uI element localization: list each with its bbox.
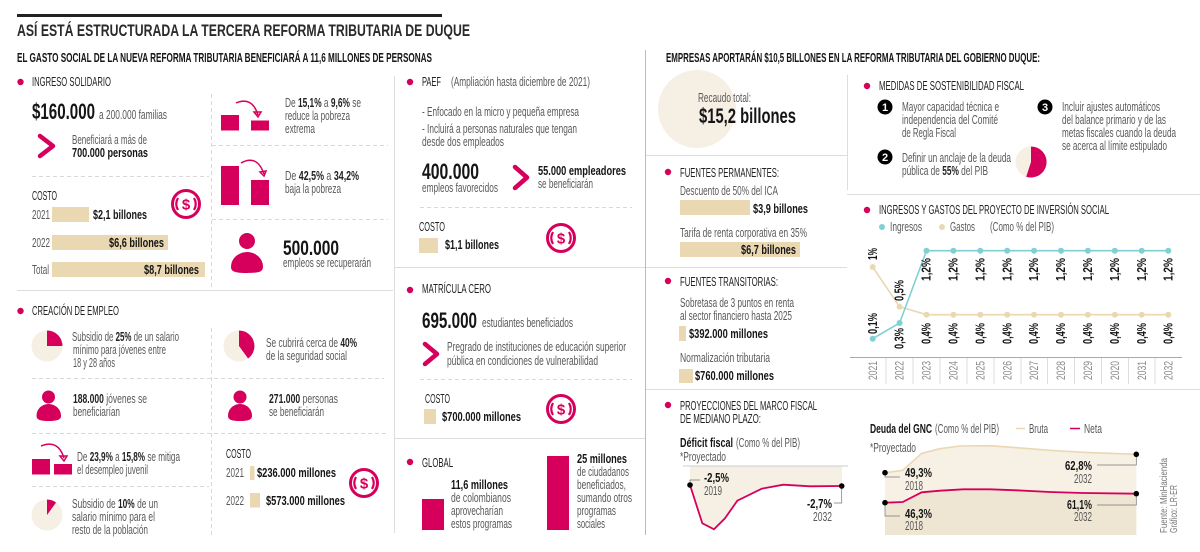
- stat: 695.000: estudiantes beneficiados: [482, 315, 573, 330]
- bullet heading: matrícula cero: MATRÍCULA CERO: [422, 281, 491, 296]
- heading: gasto social: EL GASTO SOCIAL DE LA NUEVA REFORMA TRIBUTARIA BENEFICIARÁ A 11,6 MILLONES DE PERSONAS: [17, 50, 432, 65]
- stat: 500.000 empleos: [283, 237, 371, 270]
- cost bars: creación de empleo: COSTO: [226, 446, 251, 461]
- panel: fuentes permanentes: $6,7 billones: [741, 242, 796, 257]
- x axis years: 2027: [1027, 361, 1041, 380]
- cost bars: ingreso solidario: 2022: [32, 235, 50, 250]
- data labels: 1,2%: [1134, 258, 1149, 281]
- cost bars: ingreso solidario: COSTO: [32, 188, 57, 203]
- panel: global: [407, 451, 632, 531]
- measure 3: 3: [1042, 102, 1048, 114]
- text: subsidio 25: [72, 329, 179, 370]
- icon: coin: $: [360, 476, 369, 492]
- cost bars: creación de empleo: $236.000 millones: [257, 465, 336, 480]
- chart title and legend: Neta: [1084, 421, 1102, 436]
- panel: fuentes transitorias: FUENTES TRANSITORIAS:: [680, 274, 778, 289]
- data labels: 0,4%: [1080, 323, 1095, 344]
- text: subsidio 10: [72, 496, 158, 537]
- legend: (Como % del PIB): [990, 219, 1054, 234]
- bullet heading: global: [407, 455, 453, 470]
- legend: [879, 219, 1054, 234]
- bullet heading: ingreso solidario: [17, 74, 111, 89]
- panel: recaudo total: Recaudo total:: [698, 90, 751, 105]
- icon: coin: $: [182, 196, 191, 214]
- measure 1: 1: [882, 102, 888, 114]
- x axis years: 2025: [974, 361, 988, 380]
- bullet heading: ingreso solidario: INGRESO SOLIDARIO: [32, 74, 111, 89]
- data labels: 1,2%: [1026, 258, 1041, 281]
- text: subsidio 10: Subsidio de 10% de un: [72, 496, 158, 511]
- text: pobreza extrema: reduce la pobreza: [285, 108, 350, 123]
- x axis years: 2021: [866, 361, 880, 380]
- text: 188.000: 188.000 jóvenes se: [73, 391, 147, 406]
- text: seguridad social: [266, 335, 357, 363]
- bullet heading: matrícula cero: [407, 281, 491, 296]
- text: desempleo juvenil: De 23,9% a 15,8% se mitiga: [77, 449, 180, 464]
- pie: 40 percent: [224, 330, 254, 362]
- data labels: 0,4%: [1026, 323, 1041, 344]
- data labels: 0,5%: [892, 280, 906, 301]
- cost bars: ingreso solidario: [32, 188, 205, 277]
- bullet heading: medidas: [864, 78, 1024, 93]
- bar: 25 millones: [547, 456, 569, 530]
- panel: medidas de sostenibilidad fiscal: [864, 78, 1176, 178]
- measure 3: [1038, 99, 1176, 153]
- text: 11,6 millones: [451, 477, 512, 531]
- panel: fuentes permanentes: Descuento de 50% del ICA: [680, 183, 778, 198]
- text: pregrado: pública en condiciones de vulnerabilidad: [447, 353, 598, 368]
- pie: 55 percent: [1016, 146, 1047, 178]
- area chart: deuda: 61,1%: [1067, 497, 1092, 512]
- area chart: deuda: 62,8%: [1065, 458, 1092, 473]
- icon: coin: [548, 396, 574, 422]
- line chart: ingresos y gastos: [850, 202, 1182, 384]
- amount: 160.000: $160.000: [32, 99, 95, 124]
- stat: 400.000: 400.000: [422, 159, 479, 184]
- icon: person: [231, 233, 263, 273]
- icon: pobreza bars: [221, 160, 269, 205]
- data labels: 1,2%: [1160, 258, 1175, 281]
- text: seguridad social: de la seguridad social: [266, 348, 347, 363]
- panel: fuentes transitorias: Normalización tributaria: [680, 350, 770, 365]
- data labels: 1,2%: [918, 258, 934, 281]
- text: pregrado: Pregrado de instituciones de educación superior: [447, 339, 626, 354]
- panel: fuentes permanentes: [665, 165, 808, 257]
- text: desempleo juvenil: [77, 449, 180, 477]
- bullet heading: proyecciones: [665, 398, 817, 426]
- stat: 500.000 empleos: 500.000: [283, 237, 339, 260]
- text: beneficiará: Beneficiará a más de: [72, 132, 147, 147]
- panel: proyecciones déficit fiscal: [665, 398, 848, 529]
- cost bars: ingreso solidario: $2,1 billones: [93, 207, 147, 222]
- title rule and heading: [17, 14, 470, 40]
- cost bars: ingreso solidario: Total: [32, 262, 49, 277]
- source credit: Gráfico: LR-ER: [1168, 485, 1180, 533]
- panel: fuentes transitorias: [665, 274, 794, 383]
- chart title and legend: Bruta: [1029, 421, 1048, 436]
- measure 2: 2: [882, 152, 888, 164]
- cost bar: matrícula: $700.000 millones: [442, 409, 521, 424]
- chart title: déficit: (Como % del PIB): [736, 435, 800, 450]
- text: empleadores: [538, 163, 626, 191]
- title rule and heading: ASÍ ESTÁ ESTRUCTURADA LA TERCERA REFORMA TRIBUTARIA DE DUQUE: [17, 21, 470, 40]
- panel: recaudo total: $15,2 billones: [699, 105, 796, 128]
- data labels: 1,2%: [999, 258, 1014, 281]
- text: subsidio 10: salario mínimo para el: [72, 509, 155, 524]
- icon: coin: [172, 190, 200, 218]
- text: empleadores: se beneficiarán: [538, 176, 593, 191]
- panel: ingreso solidario: [17, 74, 388, 287]
- cost bars: ingreso solidario: 2021: [32, 207, 50, 222]
- text: pregrado: [447, 339, 626, 368]
- data labels: 1%: [865, 248, 880, 260]
- x axis years: 2023: [920, 361, 934, 380]
- data labels: [865, 248, 1175, 349]
- bullet heading: PAEF: PAEF: [422, 74, 441, 89]
- x axis years: 2032: [1161, 361, 1175, 380]
- data labels: 0,3%: [892, 328, 906, 349]
- data labels: 0,4%: [999, 323, 1014, 344]
- data labels: 1,2%: [1053, 258, 1068, 281]
- text: subsidio 25: mínimo para jóvenes entre: [73, 342, 166, 357]
- area chart: déficit fiscal: -2,7%: [807, 496, 832, 511]
- x axis years: 2024: [946, 361, 960, 380]
- amount: 160.000: [32, 99, 167, 124]
- cost bars: ingreso solidario: $6,6 billones: [109, 235, 164, 250]
- measure 1: [878, 99, 999, 140]
- data labels: 0,4%: [1053, 323, 1068, 344]
- pie: 25 percent: [32, 330, 62, 362]
- text: 271.000: se beneficiarán: [269, 404, 324, 419]
- data labels: 0,4%: [1134, 323, 1149, 344]
- measure 2: Definir un anclaje de la deuda: [902, 150, 1011, 165]
- text: desempleo juvenil: el desempleo juvenil: [77, 462, 148, 477]
- text: 188.000: beneficiarían: [73, 404, 120, 419]
- measure 2: [878, 150, 1011, 178]
- panel: fuentes transitorias: Sobretasa de 3 puntos en renta: [680, 295, 794, 310]
- x axis years: [866, 361, 1175, 380]
- data labels: 1,2%: [946, 258, 960, 281]
- chart title: déficit: *Proyectado: [680, 449, 726, 464]
- legend: Ingresos: [890, 219, 922, 234]
- icon: coin: [548, 224, 574, 252]
- series: ingresos: [870, 248, 1171, 342]
- text: pobreza extrema: [285, 95, 361, 136]
- data labels: 1,2%: [1080, 258, 1095, 281]
- data labels: 0,4%: [972, 323, 988, 344]
- panel: fuentes permanentes: $3,9 billones: [753, 201, 808, 216]
- x axis years: 2020: [1108, 361, 1122, 380]
- text: subsidio 10: resto de la población: [72, 522, 148, 537]
- text: 25 millones: 25 millones: [577, 451, 627, 466]
- amount: 160.000: a 200.000 familias: [99, 107, 167, 122]
- text: empleadores: 55.000 empleadores: [538, 163, 626, 178]
- measure 2: pública de 55% del PIB: [902, 163, 988, 178]
- icon: coin: $: [557, 230, 566, 248]
- cost bar: PAEF: [419, 219, 499, 253]
- icon: chevron: [515, 167, 527, 188]
- legend: Gastos: [950, 219, 975, 234]
- text: 11,6 millones: estos programas: [451, 516, 512, 531]
- bullet heading: ingresos y gastos: [864, 202, 1109, 217]
- pie: 10 percent: [32, 500, 62, 530]
- measure 1: Mayor capacidad técnica e: [902, 99, 999, 114]
- x axis years: 2026: [1000, 361, 1014, 380]
- icon: person: [228, 390, 252, 421]
- cost bars: creación de empleo: 2021: [226, 465, 244, 480]
- bullet heading: PAEF: (Ampliación hasta diciembre de 2021): [451, 74, 590, 89]
- bullet heading: creación de empleo: [17, 303, 119, 318]
- cost bar: matrícula: [424, 391, 521, 424]
- panel: fuentes transitorias: $392.000 millones: [689, 326, 768, 341]
- measure 1: independencia del Comité: [902, 112, 998, 127]
- text: 11,6 millones: de colombianos: [451, 490, 511, 505]
- stat: 400.000: empleos favorecidos: [422, 180, 498, 195]
- data labels: 1,2%: [1107, 258, 1122, 281]
- bullet heading: creación de empleo: CREACIÓN DE EMPLEO: [32, 303, 119, 318]
- text: 25 millones: sumando otros: [577, 490, 632, 505]
- chart title and legend: *Proyectado: [870, 440, 916, 455]
- panel: creación de empleo: [17, 303, 387, 537]
- cost bars: creación de empleo: $573.000 millones: [266, 493, 345, 508]
- source credit: Fuente: MinHacienda: [1158, 458, 1170, 533]
- text: 25 millones: sociales: [577, 516, 605, 531]
- area chart: déficit fiscal: 2032: [813, 509, 832, 524]
- area chart: déficit fiscal: -2,5%: [704, 470, 729, 485]
- text: 25 millones: [577, 451, 632, 531]
- chart title and legend: Deuda del GNC: [870, 421, 932, 436]
- chart title: déficit: Déficit fiscal: [680, 435, 733, 450]
- cost bar: matrícula: COSTO: [425, 391, 450, 406]
- source credit: [1158, 458, 1180, 533]
- area chart: deuda: 2032: [1074, 509, 1092, 524]
- icon: coin: $: [557, 402, 566, 418]
- series: gastos: [870, 264, 1171, 318]
- bullet heading: medidas: MEDIDAS DE SOSTENIBILIDAD FISCAL: [879, 78, 1024, 93]
- stat: 400.000: [422, 159, 498, 195]
- text: pobreza extrema: extrema: [285, 121, 315, 136]
- text: 25 millones: beneficiados,: [577, 477, 626, 492]
- text: 271.000: [269, 391, 338, 419]
- area chart: deuda: 2018: [905, 518, 923, 533]
- icon: coin: [350, 470, 378, 496]
- chart title and legend: [870, 421, 1102, 455]
- icon: person: [36, 390, 61, 421]
- data labels: 1,2%: [972, 258, 988, 281]
- text: pobreza: De 42,5% a 34,2%: [285, 168, 359, 183]
- icon: desempleo bars: [32, 444, 72, 474]
- data labels: 0,1%: [865, 313, 880, 334]
- bullet heading: proyecciones: PROYECCIONES DEL MARCO FISCAL: [680, 398, 817, 413]
- bullet heading: global: GLOBAL: [422, 455, 453, 470]
- text: 188.000: [73, 391, 147, 419]
- text: seguridad social: Se cubrirá cerca de 40%: [266, 335, 357, 350]
- stat: 500.000 empleos: empleos se recuperarán: [283, 255, 371, 270]
- bullet heading: PAEF: [407, 74, 590, 89]
- text: PAEF description: - Incluirá a personas naturales que tengan: [422, 121, 577, 136]
- panel: matrícula cero: [407, 281, 632, 424]
- area chart: déficit fiscal: [683, 466, 848, 529]
- text: 25 millones: programas: [577, 503, 616, 518]
- bar: 11,6 millones: [422, 499, 444, 530]
- text: 11,6 millones: 11,6 millones: [451, 477, 508, 492]
- icon: chevron: [425, 344, 437, 364]
- chart title and legend: (Como % del PIB): [935, 421, 999, 436]
- area chart: deuda: 49,3%: [905, 465, 932, 480]
- text: beneficiará: [72, 132, 148, 160]
- stat: 695.000: [422, 308, 573, 333]
- data labels: 0,4%: [1107, 323, 1122, 344]
- panel: PAEF: [407, 74, 632, 253]
- icon: pobreza extrema bars: [221, 101, 269, 130]
- data labels: 0,4%: [946, 323, 960, 344]
- panel: fuentes permanentes: FUENTES PERMANENTES:: [680, 165, 779, 180]
- panel: fuentes transitorias: al sector financiero hasta 2025: [680, 308, 792, 323]
- text: pobreza extrema: De 15,1% a 9,6% se: [285, 95, 361, 110]
- area chart: deuda: 2018: [905, 478, 923, 493]
- text: pobreza: baja la pobreza: [285, 181, 341, 196]
- cost bars: creación de empleo: 2022: [226, 493, 244, 508]
- x axis years: 2028: [1054, 361, 1068, 380]
- area chart: deuda: 2032: [1074, 471, 1092, 486]
- data labels: 0,4%: [918, 323, 934, 344]
- area chart: deuda: 46,3%: [905, 506, 932, 521]
- cost bar: PAEF: $1,1 billones: [445, 237, 499, 252]
- area chart: déficit fiscal: 2019: [704, 483, 722, 498]
- text: PAEF description: - Enfocado en la micro y pequeña empresa: [422, 104, 579, 119]
- text: 271.000: 271.000 personas: [269, 391, 338, 406]
- text: subsidio 25: 18 y 28 años: [73, 355, 115, 370]
- text: pobreza: [285, 168, 359, 196]
- cost bars: ingreso solidario: $8,7 billones: [144, 262, 199, 277]
- x axis years: 2031: [1135, 361, 1149, 380]
- text: subsidio 25: Subsidio de 25% de un salario: [72, 329, 179, 344]
- bullet heading: proyecciones: DE MEDIANO PLAZO:: [680, 411, 761, 426]
- panel: fuentes permanentes: Tarifa de renta corporativa en 35%: [680, 225, 807, 240]
- cost bar: PAEF: COSTO: [419, 219, 445, 234]
- x axis years: 2029: [1081, 361, 1095, 380]
- text: 11,6 millones: aprovecharían: [451, 503, 503, 518]
- panel: fuentes transitorias: $760.000 millones: [695, 368, 774, 383]
- text: 25 millones: de ciudadanos: [577, 464, 629, 479]
- stat: 695.000: 695.000: [422, 308, 477, 333]
- measure 1: de Regla Fiscal: [902, 125, 956, 140]
- chart title: déficit: [680, 435, 800, 464]
- text: PAEF description: [422, 104, 579, 149]
- cost bars: creación de empleo: [226, 446, 345, 508]
- panel: deuda del GNC: [870, 421, 1139, 535]
- icon: chevron: [40, 136, 53, 156]
- text: PAEF description: desde dos empleados: [422, 134, 504, 149]
- area chart: deuda: [882, 446, 1139, 535]
- text: beneficiará: 700.000 personas: [72, 145, 148, 160]
- panel: recaudo total: [658, 70, 796, 148]
- x axis years: 2022: [892, 361, 906, 380]
- data labels: 0,4%: [1160, 323, 1175, 344]
